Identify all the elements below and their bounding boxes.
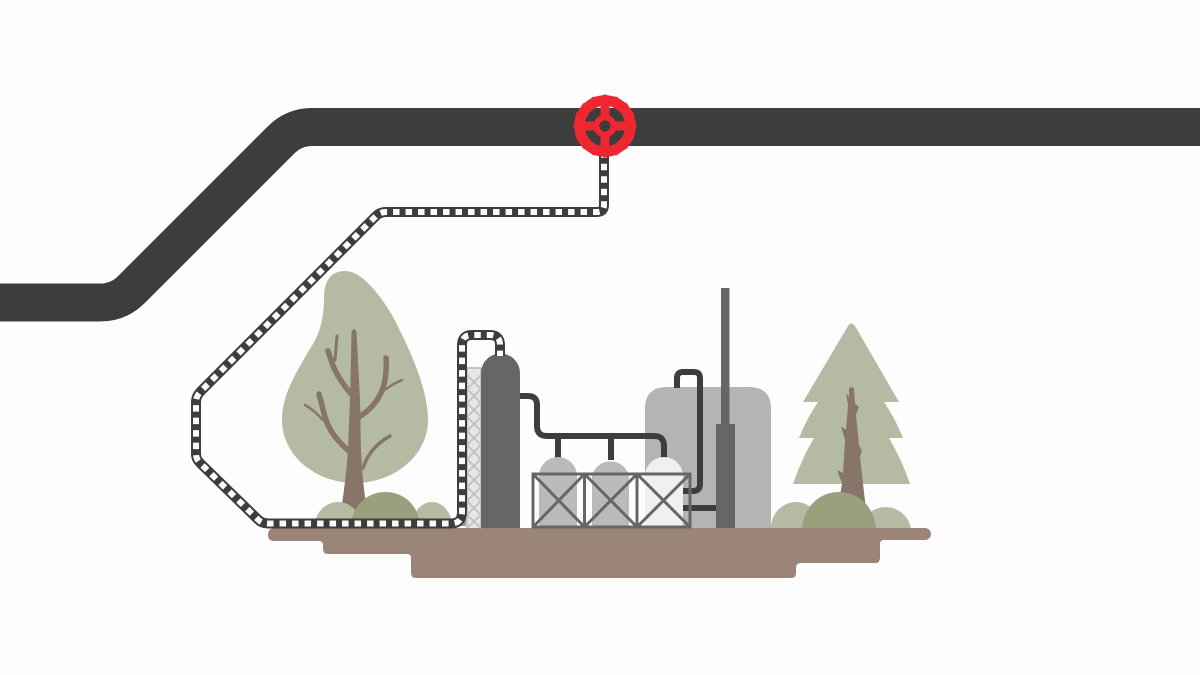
distillation column	[481, 354, 520, 528]
small tank 1	[539, 457, 577, 528]
flare stack	[716, 288, 735, 528]
right tree	[793, 324, 910, 510]
lattice tower	[466, 368, 481, 528]
valve wheel	[574, 94, 636, 158]
feeder pipe	[196, 151, 604, 524]
small tank 3	[645, 457, 683, 528]
ground	[268, 528, 931, 578]
main pipeline	[0, 127, 1200, 302]
tank frame	[533, 474, 690, 527]
right bushes	[771, 492, 911, 528]
left tree	[282, 271, 428, 510]
small tank 2	[592, 461, 629, 528]
refinery	[466, 288, 771, 528]
process pipes	[519, 372, 717, 508]
left bushes	[315, 492, 466, 526]
large storage tank	[645, 387, 771, 528]
